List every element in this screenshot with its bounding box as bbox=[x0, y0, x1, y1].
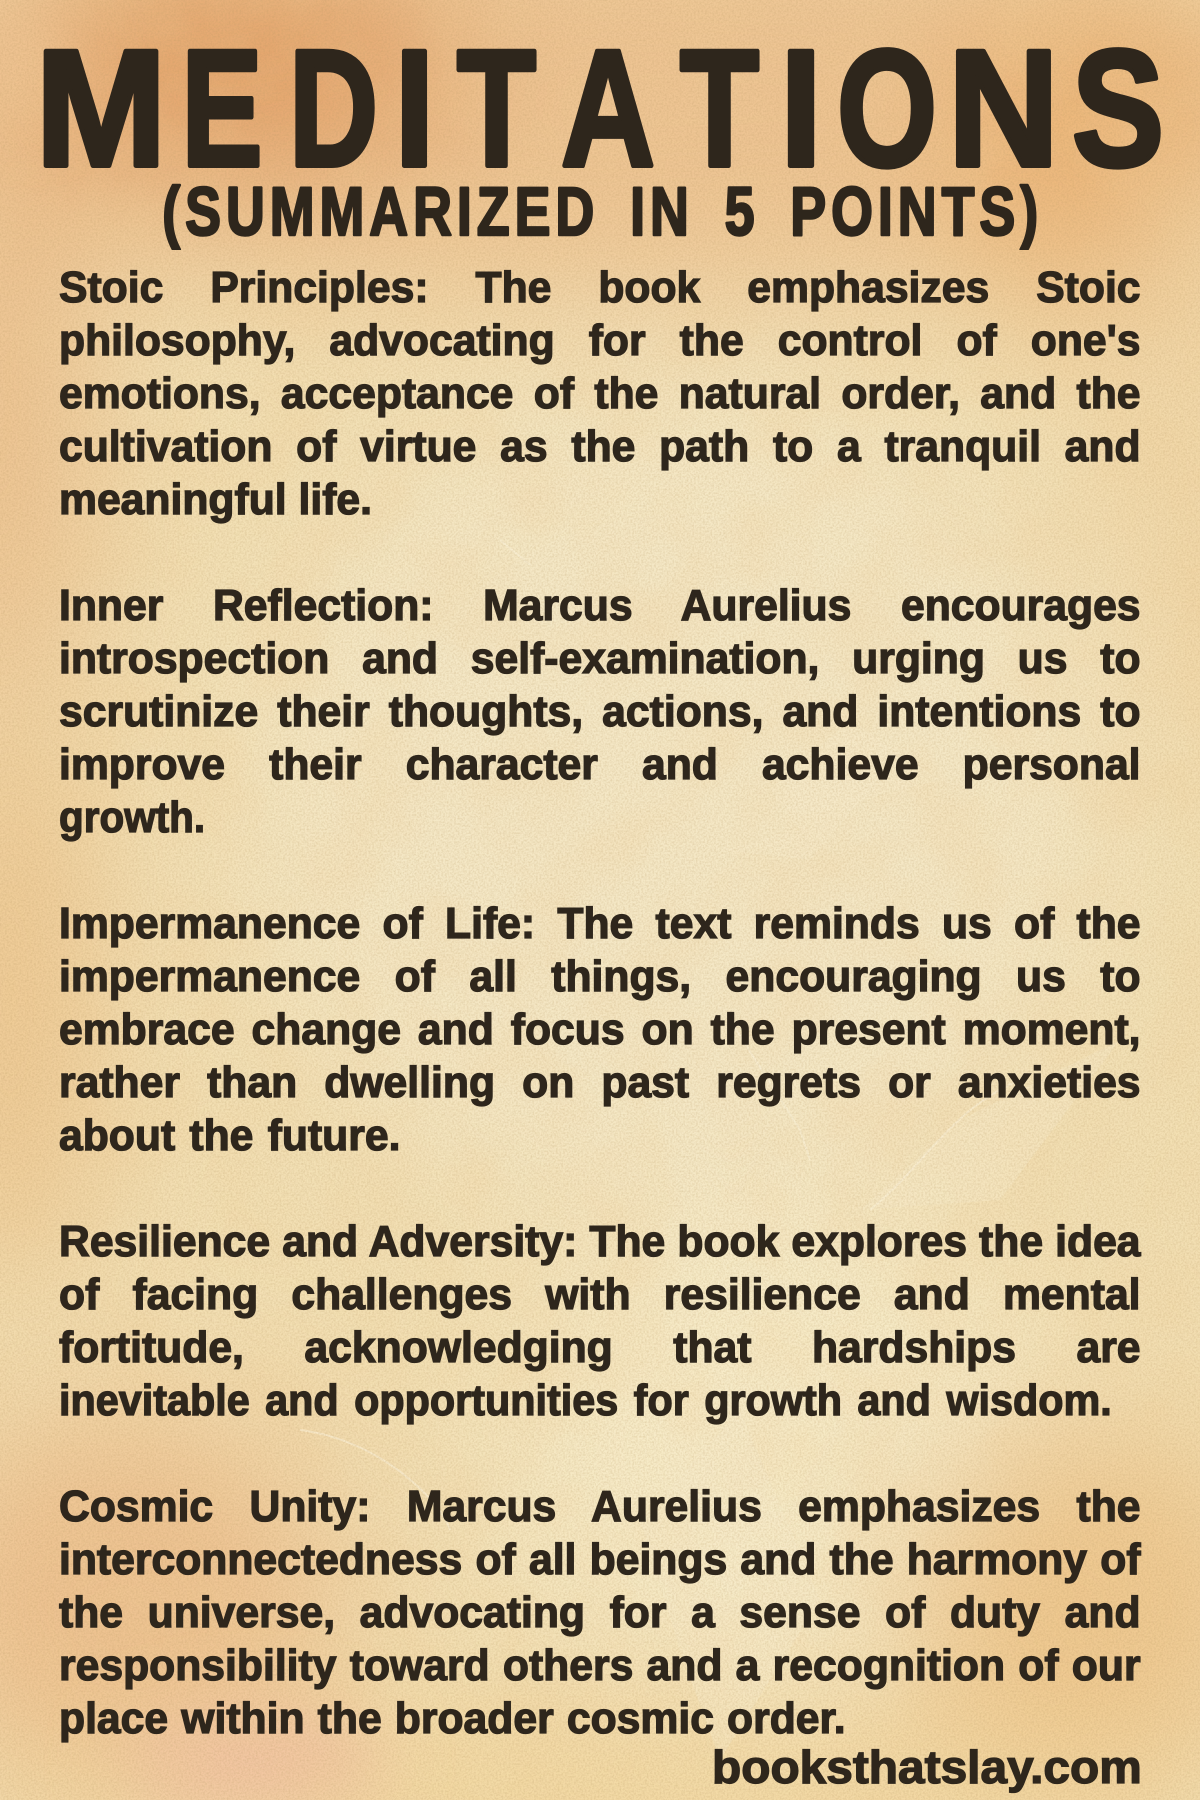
title: O bbox=[837, 16, 937, 202]
point 5: Cosmic Unity: interconnectedness of all beings and the harmony of bbox=[59, 1535, 1141, 1584]
title: E bbox=[182, 16, 262, 202]
point 2: Inner Reflection: scrutinize their thoughts, actions, and intentions to bbox=[59, 687, 1141, 736]
point 1: Stoic Principles: meaningful life. bbox=[59, 475, 372, 524]
point 4: Resilience and Adversity: inevitable and opportunities for growth and wisdom. bbox=[59, 1376, 1112, 1425]
point 2: Inner Reflection: improve their character and achieve personal bbox=[59, 740, 1141, 789]
point 3: Impermanence of Life: about the future. bbox=[59, 1111, 400, 1160]
point 4: Resilience and Adversity: Resilience and Adversity: The book explores the idea bbox=[59, 1217, 1141, 1266]
title: A bbox=[561, 16, 655, 202]
point 5: Cosmic Unity: place within the broader cosmic order. bbox=[59, 1694, 846, 1743]
point 5: Cosmic Unity bbox=[58, 1482, 1142, 1743]
title: D bbox=[289, 16, 378, 202]
point 2: Inner Reflection: Inner Reflection: Marcus Aurelius encourages bbox=[59, 581, 1141, 630]
point 3: Impermanence of Life: Impermanence of Life: The text reminds us of the bbox=[59, 899, 1141, 948]
header block bbox=[36, 16, 1164, 250]
point 5: Cosmic Unity: Cosmic Unity: Marcus Aurelius emphasizes the bbox=[59, 1482, 1141, 1531]
title: T bbox=[457, 16, 536, 202]
title: T bbox=[680, 16, 759, 202]
point 2: Inner Reflection bbox=[59, 581, 1141, 842]
point 1: Stoic Principles bbox=[59, 263, 1141, 524]
title: S bbox=[1072, 16, 1164, 202]
point 4: Resilience and Adversity bbox=[59, 1217, 1142, 1425]
point 3: Impermanence of Life: impermanence of all things, encouraging us to bbox=[59, 952, 1141, 1001]
point 3: Impermanence of Life: rather than dwelling on past regrets or anxieties bbox=[59, 1058, 1141, 1107]
title: N bbox=[948, 16, 1059, 202]
point 5: Cosmic Unity: responsibility toward others and a recognition of our bbox=[59, 1641, 1141, 1690]
point 2: Inner Reflection: introspection and self-examination, urging us to bbox=[59, 634, 1141, 683]
point 1: Stoic Principles: Stoic Principles: The book emphasizes Stoic bbox=[59, 263, 1141, 312]
title: I bbox=[394, 16, 434, 202]
point 1: Stoic Principles: emotions, acceptance of the natural order, and the bbox=[59, 369, 1141, 418]
title: I bbox=[780, 16, 822, 202]
point 2: Inner Reflection: growth. bbox=[59, 793, 205, 842]
point 3: Impermanence of Life: embrace change and focus on the present moment, bbox=[59, 1005, 1141, 1054]
subtitle: (SUMMARIZED IN 5 POINTS) bbox=[162, 174, 1038, 250]
title: M bbox=[36, 16, 166, 202]
point 1: Stoic Principles: cultivation of virtue as the path to a tranquil and bbox=[59, 422, 1141, 471]
point 5: Cosmic Unity: the universe, advocating for a sense of duty and bbox=[59, 1588, 1141, 1637]
point 3: Impermanence of Life bbox=[59, 899, 1141, 1160]
website credit: booksthatslay.com bbox=[712, 1741, 1142, 1793]
point 1: Stoic Principles: philosophy, advocating for the control of one's bbox=[59, 316, 1141, 365]
point 4: Resilience and Adversity: of facing challenges with resilience and mental bbox=[59, 1270, 1141, 1319]
point 4: Resilience and Adversity: fortitude, acknowledging that hardships are bbox=[59, 1323, 1141, 1372]
